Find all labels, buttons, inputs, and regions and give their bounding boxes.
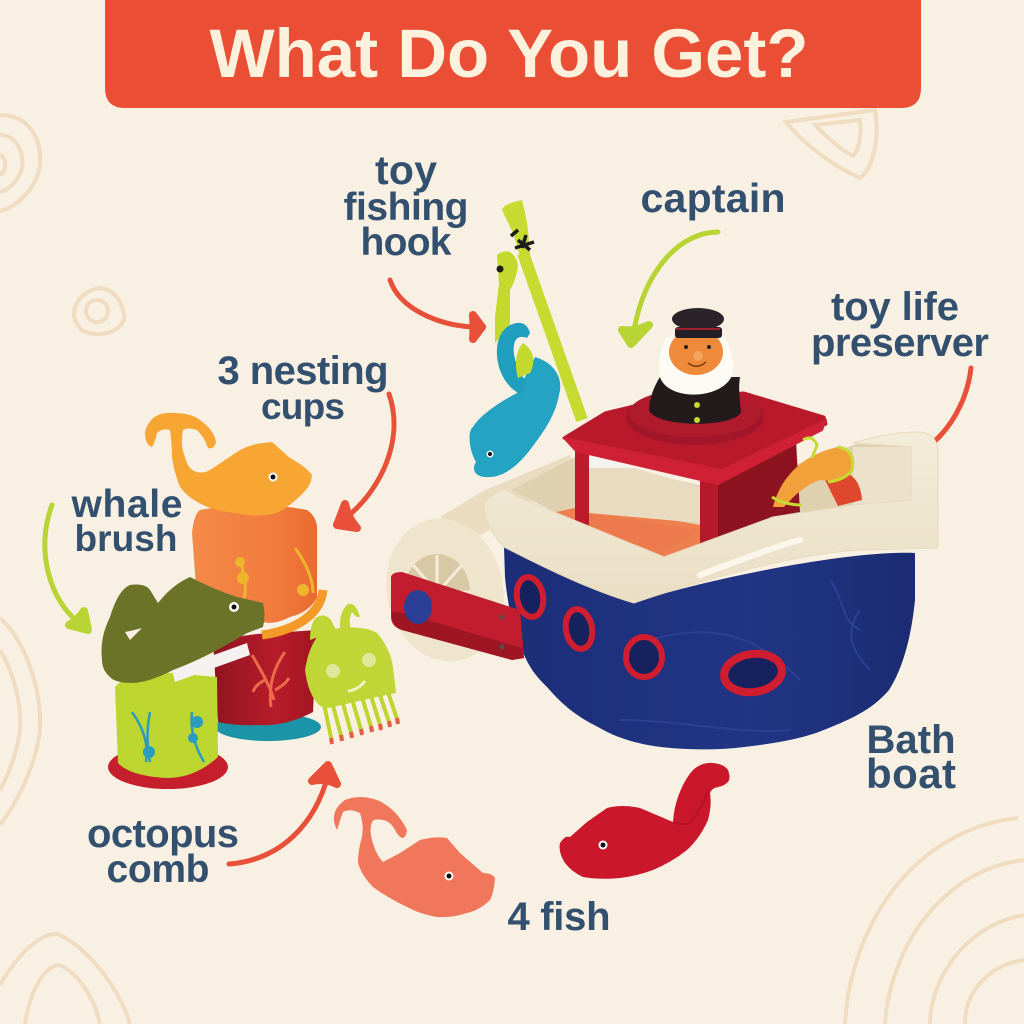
hull bbox=[504, 547, 915, 749]
arrow: hook bbox=[390, 280, 482, 339]
green cup bbox=[115, 672, 218, 778]
teething ring bbox=[262, 590, 323, 635]
red cup bbox=[213, 630, 317, 725]
arrow: octopus comb bbox=[229, 765, 337, 864]
label: toy fishing hook bbox=[344, 147, 468, 264]
interior back wall bbox=[511, 432, 925, 560]
paddle wheel bbox=[373, 455, 575, 672]
label: octopus comb bbox=[87, 812, 239, 891]
label: 3 nesting cups bbox=[218, 349, 388, 427]
portholes bbox=[514, 575, 784, 696]
arrow: whale brush bbox=[45, 505, 88, 630]
toy: octopus comb bbox=[305, 604, 398, 744]
arrow: nesting cups bbox=[337, 394, 394, 528]
label: toy fishing hook: hook bbox=[360, 221, 452, 264]
label: toy life preserver bbox=[811, 285, 989, 365]
label: octopus comb: comb bbox=[106, 848, 210, 891]
title banner bbox=[105, 0, 921, 108]
label: 4 fish: 4 fish bbox=[508, 895, 610, 939]
label: bath boat: boat bbox=[866, 750, 956, 797]
toy: nesting cups stack bbox=[108, 505, 323, 789]
orange cup bbox=[192, 505, 317, 623]
cabin bbox=[564, 389, 826, 553]
toy: bath boat bbox=[373, 308, 938, 749]
captain bbox=[649, 308, 741, 424]
label: toy life preserver: preserver bbox=[811, 321, 989, 365]
label: 3 nesting cups: 3 nesting bbox=[218, 349, 388, 393]
label: bath boat: Bath bbox=[866, 718, 956, 762]
red paddle arm bbox=[391, 572, 524, 660]
label: bath boat bbox=[866, 718, 956, 797]
toy: fishing rod and hook bbox=[470, 200, 582, 477]
title banner: What Do You Get? bbox=[210, 15, 808, 92]
arrow: life preserver bbox=[869, 368, 971, 476]
label: captain: captain bbox=[640, 175, 786, 221]
label: 3 nesting cups: cups bbox=[261, 386, 345, 427]
arrow: captain bbox=[622, 232, 718, 344]
toy: whale brush bbox=[102, 577, 264, 683]
toy: red fish bbox=[560, 763, 730, 879]
label: toy fishing hook: toy bbox=[375, 147, 437, 193]
teal base bbox=[215, 713, 321, 741]
green cup base bbox=[108, 745, 228, 789]
label: toy fishing hook: fishing bbox=[344, 186, 468, 229]
label: whale brush bbox=[70, 483, 182, 559]
label: whale brush: whale bbox=[70, 483, 182, 526]
rim bbox=[484, 432, 938, 603]
label: toy life preserver: toy life bbox=[831, 285, 959, 329]
toy: orange fish on cups bbox=[145, 413, 312, 516]
toy: coral fish bbox=[334, 797, 495, 917]
label: whale brush: brush bbox=[74, 518, 178, 559]
label: octopus comb: octopus bbox=[87, 812, 239, 856]
toy life preserver bbox=[772, 438, 862, 507]
